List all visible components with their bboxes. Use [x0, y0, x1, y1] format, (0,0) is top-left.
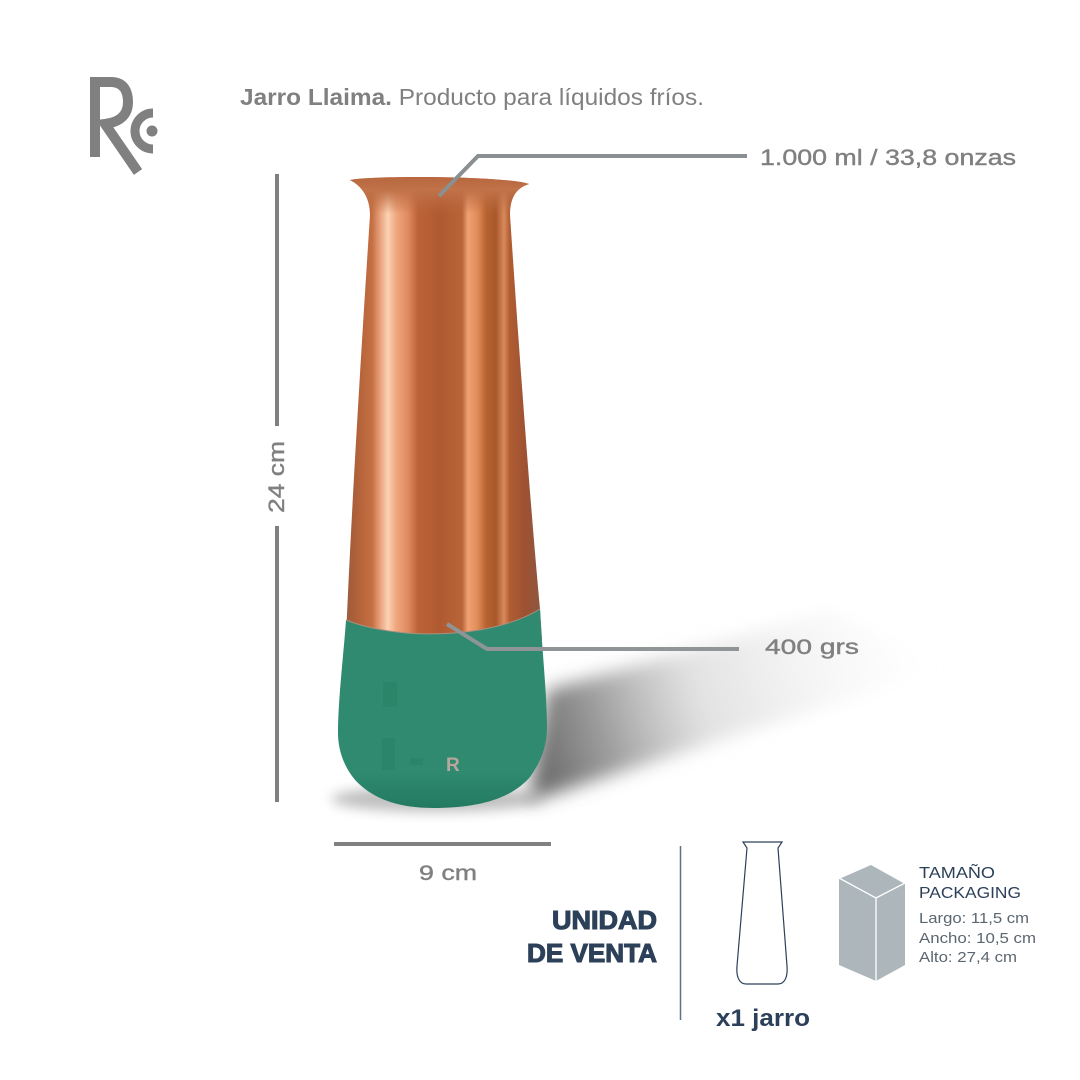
weight callout: 400 grs [765, 636, 859, 659]
packaging dimensions [919, 910, 1036, 966]
title: Jarro Llaima. Producto para líquidos fríos. [240, 84, 704, 110]
packaging heading: PACKAGING [919, 885, 1021, 902]
jar neck and rim shading [350, 177, 529, 214]
quantity label: x1 jarro [716, 1005, 810, 1032]
jar shadow [331, 612, 947, 812]
capacity callout [439, 145, 1016, 196]
logo: Rc mark [95, 82, 158, 172]
jar green base [338, 609, 547, 808]
capacity callout: 1.000 ml / 33,8 onzas [760, 145, 1016, 170]
icon: jar outline [737, 842, 787, 984]
packaging dimensions: Ancho: 10,5 cm [919, 930, 1036, 947]
weight callout [447, 624, 859, 659]
icon: packaging box [839, 865, 905, 981]
height dimension: 24 cm [264, 441, 289, 513]
sales unit heading [527, 905, 657, 968]
sales unit heading: DE VENTA [527, 938, 657, 968]
jar base blotches [382, 682, 423, 770]
packaging dimensions: Alto: 27,4 cm [919, 949, 1017, 966]
copper and green seam [346, 609, 540, 634]
width dimension: 9 cm [419, 862, 477, 885]
packaging heading: TAMAÑO [919, 862, 995, 882]
packaging heading [919, 862, 1021, 902]
small logo on jar: R [446, 755, 460, 776]
divider [680, 846, 682, 1020]
product: copper and green jar [338, 177, 547, 808]
packaging dimensions: Largo: 11,5 cm [919, 910, 1029, 927]
sales unit heading: UNIDAD [552, 905, 657, 935]
jar copper upper body [346, 177, 542, 640]
